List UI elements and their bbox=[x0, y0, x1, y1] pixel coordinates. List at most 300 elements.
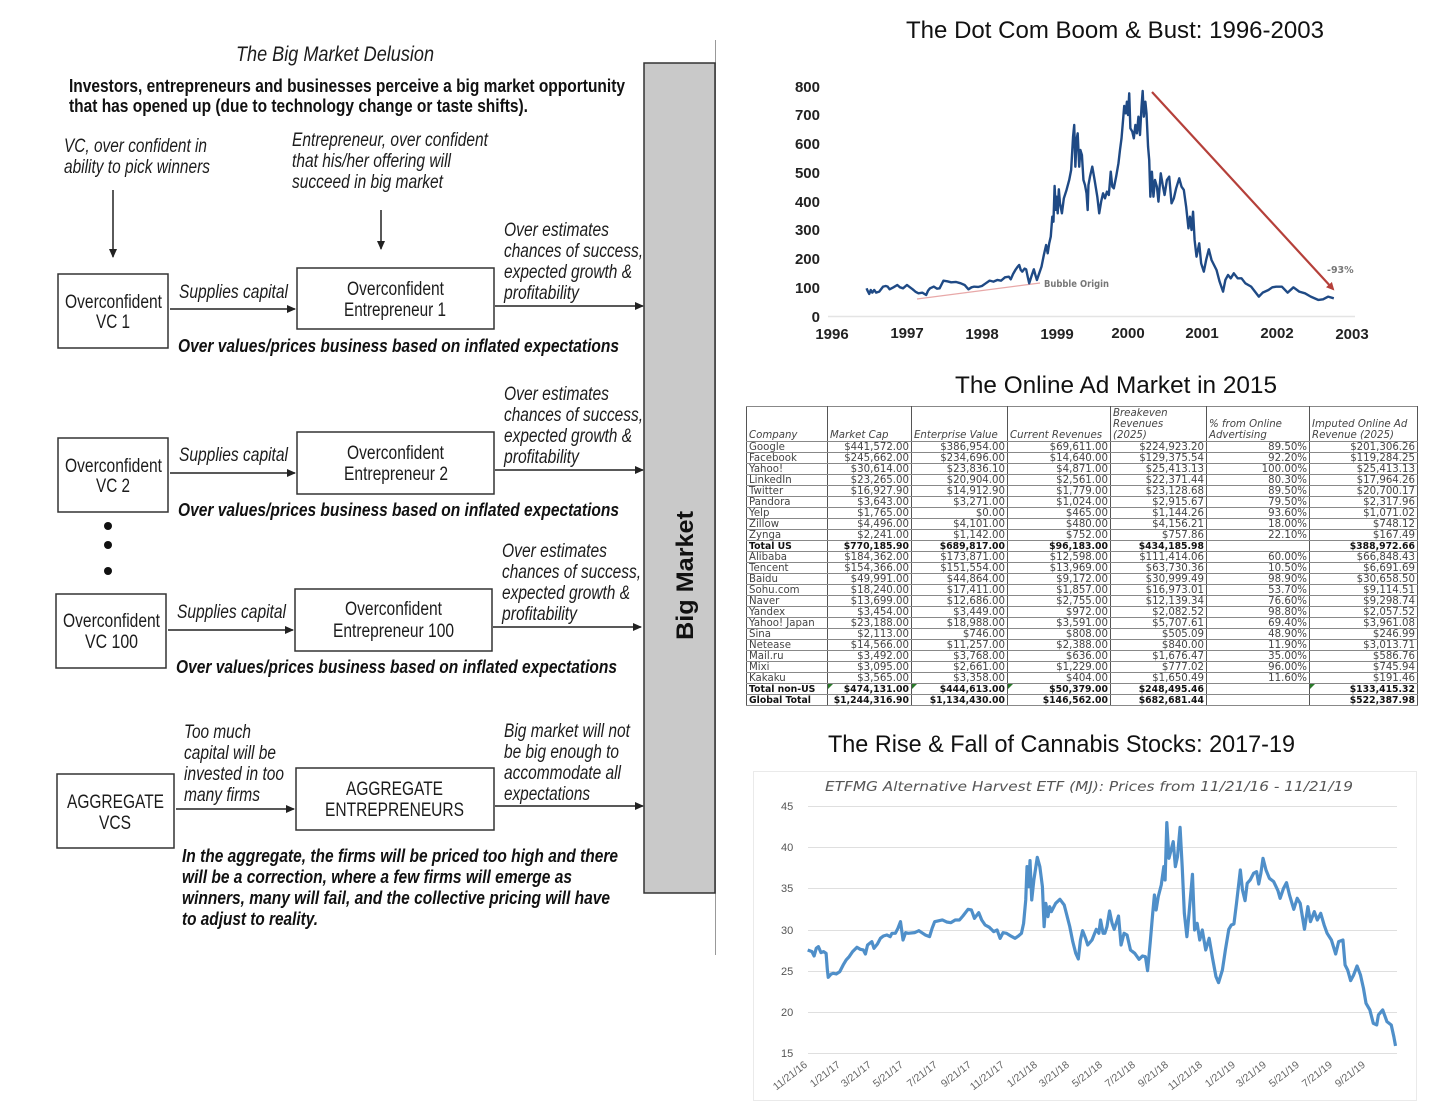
table: online ad market: Netease bbox=[749, 640, 791, 651]
diagram title: The Big Market Delusion bbox=[236, 43, 434, 66]
table: online ad market: Current Revenues bbox=[1010, 430, 1102, 441]
label: supplies capital: Supplies capital bbox=[179, 282, 289, 303]
arrow: VC 1 to entrepreneur 1 bbox=[170, 308, 295, 310]
table: online ad market: $972.00 bbox=[1066, 607, 1108, 618]
table: online ad market: $522,387.98 bbox=[1350, 695, 1415, 706]
intro statement: that has opened up (due to technology change or taste shifts). bbox=[69, 96, 528, 116]
table: online ad market: 93.60% bbox=[1268, 508, 1307, 519]
table: online ad market: $636.00 bbox=[1066, 651, 1108, 662]
table: online ad market: 98.80% bbox=[1268, 607, 1307, 618]
box: overconfident entrepreneur 2 bbox=[297, 432, 494, 494]
box: overconfident VC 2: VC 2 bbox=[96, 476, 130, 497]
table: online ad market: $191.46 bbox=[1373, 673, 1415, 684]
y axis labels: 700 bbox=[795, 107, 820, 124]
note: over estimates bbox=[501, 541, 641, 625]
note: big market will not: expectations bbox=[504, 784, 590, 805]
table: online ad market: $480.00 bbox=[1066, 519, 1108, 530]
y axis labels: 200 bbox=[795, 251, 820, 268]
table: online ad market: $3,271.00 bbox=[953, 497, 1005, 508]
y axis labels bbox=[781, 801, 793, 1060]
table: online ad market: $5,707.61 bbox=[1152, 618, 1204, 629]
table: online ad market: $23,188.00 bbox=[851, 618, 909, 629]
note: over estimates: chances of success, bbox=[504, 241, 643, 262]
arrow: entrepreneur note down bbox=[380, 210, 382, 249]
arrow: VC note down bbox=[112, 190, 114, 257]
table: online ad market: Enterprise Value bbox=[914, 430, 998, 441]
table: online ad market: $9,114.51 bbox=[1363, 585, 1415, 596]
table: online ad market: 11.60% bbox=[1268, 673, 1307, 684]
note: too much capital: many firms bbox=[184, 785, 260, 806]
row: VC 100 bbox=[56, 541, 641, 677]
table: online ad market: $12,598.00 bbox=[1050, 552, 1108, 563]
table: online ad market: $3,492.00 bbox=[857, 651, 909, 662]
table: online ad market: $808.00 bbox=[1066, 629, 1108, 640]
table: online ad market: $18,240.00 bbox=[851, 585, 909, 596]
conclusion text: to adjust to reality. bbox=[182, 909, 318, 929]
table: online ad market: 48.90% bbox=[1268, 629, 1307, 640]
x axis labels: 1996 bbox=[815, 326, 849, 343]
table: online ad market: $20,700.17 bbox=[1357, 486, 1415, 497]
table: online ad market: Zynga bbox=[749, 530, 781, 541]
y axis labels: 500 bbox=[795, 165, 820, 182]
note: over estimates: Over estimates bbox=[504, 384, 609, 405]
note: overconfident VC: ability to pick winners bbox=[64, 157, 210, 178]
table: online ad market: 53.70% bbox=[1268, 585, 1307, 596]
table: online ad market: $30,999.49 bbox=[1146, 574, 1204, 585]
table: online ad market: $2,915.67 bbox=[1152, 497, 1204, 508]
note: over values: Over values/prices business based on inflated expectations bbox=[178, 500, 619, 520]
table: online ad market: $14,912.90 bbox=[947, 486, 1005, 497]
x axis labels: 5/21/19 bbox=[1267, 1059, 1302, 1090]
table: online ad market: $746.00 bbox=[963, 629, 1005, 640]
table: online ad market: $2,561.00 bbox=[1056, 475, 1108, 486]
table: online ad market: $13,699.00 bbox=[851, 596, 909, 607]
table: online ad market: $167.49 bbox=[1373, 530, 1415, 541]
y axis labels: 40 bbox=[781, 842, 793, 854]
panel: big market delusion diagram bbox=[56, 40, 716, 955]
table: online ad market: Naver bbox=[749, 596, 779, 607]
table: online ad market: $23,836.10 bbox=[947, 464, 1005, 475]
note: overconfident entrepreneur: that his/her offering will bbox=[292, 151, 452, 172]
table: online ad market: $748.12 bbox=[1373, 519, 1415, 530]
x axis labels: 11/21/16 bbox=[771, 1059, 810, 1093]
x axis labels: 9/21/19 bbox=[1333, 1059, 1368, 1090]
table: online ad market: $682,681.44 bbox=[1139, 695, 1204, 706]
table: online ad market: $689,817.00 bbox=[940, 541, 1005, 552]
box: aggregate entrepreneurs: AGGREGATE bbox=[346, 779, 443, 800]
table: online ad market: $3,454.00 bbox=[857, 607, 909, 618]
table: online ad market: $96,183.00 bbox=[1049, 541, 1108, 552]
x axis labels: 2001 bbox=[1185, 325, 1219, 342]
note: over estimates: chances of success, bbox=[504, 405, 643, 426]
table: online ad market: $25,413.13 bbox=[1357, 464, 1415, 475]
index price line bbox=[867, 91, 1334, 300]
row: aggregate bbox=[57, 721, 643, 848]
table: online ad market: $69,611.00 bbox=[1050, 442, 1108, 453]
x axis labels: 5/21/18 bbox=[1070, 1059, 1105, 1090]
note: over estimates: profitability bbox=[501, 604, 578, 625]
table: online ad market: Twitter bbox=[749, 486, 783, 497]
table: online ad market: $441,572.00 bbox=[844, 442, 909, 453]
note: overconfident VC bbox=[64, 136, 210, 178]
table: online ad market: Global Total bbox=[749, 695, 811, 706]
arrow: aggregate VCs to aggregate entrepreneurs bbox=[176, 808, 294, 810]
note: big market will not: accommodate all bbox=[504, 763, 622, 784]
x axis labels bbox=[815, 325, 1369, 343]
table: online ad market: $2,113.00 bbox=[857, 629, 909, 640]
table: online ad market: 79.50% bbox=[1268, 497, 1307, 508]
x axis labels: 11/21/18 bbox=[1166, 1059, 1205, 1093]
note: over estimates: profitability bbox=[503, 447, 580, 468]
y axis labels: 15 bbox=[781, 1048, 793, 1060]
box: overconfident entrepreneur 2: Overconfident bbox=[347, 443, 445, 464]
label: minus 93 percent: -93% bbox=[1327, 265, 1354, 276]
table: online ad market: $777.02 bbox=[1162, 662, 1204, 673]
arrow: entrepreneur 100 to big market bbox=[493, 626, 641, 628]
table: online ad market: Alibaba bbox=[749, 552, 787, 563]
y axis labels: 30 bbox=[781, 925, 793, 937]
table: online ad market: 11.90% bbox=[1268, 640, 1307, 651]
table: online ad market: $1,024.00 bbox=[1056, 497, 1108, 508]
label: supplies capital: Supplies capital bbox=[177, 602, 287, 623]
table: online ad market: Mixi bbox=[749, 662, 769, 673]
table: online ad market bbox=[746, 406, 1418, 706]
table: online ad market: $63,730.36 bbox=[1146, 563, 1204, 574]
y axis labels: 45 bbox=[781, 801, 793, 813]
table: online ad market: $14,566.00 bbox=[851, 640, 909, 651]
note: overconfident entrepreneur: succeed in big market bbox=[292, 172, 444, 193]
y axis labels: 100 bbox=[795, 280, 820, 297]
note: over estimates: expected growth & bbox=[504, 426, 632, 447]
label: supplies capital: Supplies capital bbox=[179, 445, 289, 466]
note: overconfident VC: VC, over confident in bbox=[64, 136, 207, 157]
table: online ad market: $245,662.00 bbox=[844, 453, 909, 464]
table: online ad market: Yahoo! bbox=[749, 464, 783, 475]
table: online ad market: Breakeven bbox=[1113, 408, 1168, 419]
row: VC 2 bbox=[58, 384, 643, 520]
note: overconfident entrepreneur bbox=[292, 130, 489, 193]
y axis labels: 600 bbox=[795, 136, 820, 153]
table: online ad market: Revenue (2025) bbox=[1312, 430, 1394, 441]
conclusion text: will be a correction, where a few firms will emerge as bbox=[182, 867, 572, 887]
table: online ad market: LinkedIn bbox=[749, 475, 792, 486]
table: online ad market: $22,371.44 bbox=[1146, 475, 1204, 486]
table: online ad market: 98.90% bbox=[1268, 574, 1307, 585]
table: online ad market: $404.00 bbox=[1066, 673, 1108, 684]
note: over estimates bbox=[503, 384, 643, 468]
x axis labels: 1/21/19 bbox=[1203, 1059, 1238, 1090]
table: online ad market: $6,691.69 bbox=[1363, 563, 1415, 574]
table: online ad market: $129,375.54 bbox=[1139, 453, 1204, 464]
x axis labels: 1/21/18 bbox=[1005, 1059, 1040, 1090]
ellipsis dots bbox=[104, 522, 112, 575]
x axis labels: 1999 bbox=[1040, 326, 1074, 343]
y axis labels: 0 bbox=[812, 309, 820, 326]
table: online ad market: $119,284.25 bbox=[1350, 453, 1415, 464]
table: online ad market: 92.20% bbox=[1268, 453, 1307, 464]
table: online ad market: $3,095.00 bbox=[857, 662, 909, 673]
table: online ad market: $246.99 bbox=[1373, 629, 1415, 640]
table: online ad market: $3,013.71 bbox=[1363, 640, 1415, 651]
table: online ad market: % from Online bbox=[1209, 419, 1282, 430]
box: aggregate VCs: VCS bbox=[99, 813, 131, 834]
red decline arrow bbox=[1152, 92, 1333, 289]
line chart: dot com boom and bust bbox=[795, 79, 1369, 343]
x axis labels: 2003 bbox=[1335, 326, 1369, 343]
table: online ad market: $17,411.00 bbox=[947, 585, 1005, 596]
table: online ad market: $474,131.00 bbox=[844, 684, 909, 695]
note: over estimates: Over estimates bbox=[504, 220, 609, 241]
x axis labels: 3/21/17 bbox=[839, 1059, 874, 1090]
note: over estimates: chances of success, bbox=[502, 562, 641, 583]
table: online ad market: 22.10% bbox=[1268, 530, 1307, 541]
table: online ad market: $9,298.74 bbox=[1363, 596, 1415, 607]
table: online ad market: Kakaku bbox=[749, 673, 786, 684]
heading: online ad market: The Online Ad Market in 2015 bbox=[955, 372, 1277, 399]
box: overconfident entrepreneur 1: Overconfident bbox=[347, 279, 445, 300]
box: overconfident VC 1: Overconfident bbox=[65, 292, 163, 313]
table: online ad market: $3,565.00 bbox=[857, 673, 909, 684]
box: overconfident VC 2: Overconfident bbox=[65, 456, 163, 477]
table: online ad market: $388,972.66 bbox=[1350, 541, 1415, 552]
note: over estimates: profitability bbox=[503, 283, 580, 304]
y axis labels: 25 bbox=[781, 966, 793, 978]
x axis labels: 1/21/17 bbox=[808, 1059, 843, 1090]
table: online ad market: $4,156.21 bbox=[1152, 519, 1204, 530]
table: online ad market: Total non-US bbox=[749, 684, 815, 695]
table: online ad market: $1,229.00 bbox=[1056, 662, 1108, 673]
table: online ad market: $4,871.00 bbox=[1056, 464, 1108, 475]
note: over values: Over values/prices business based on inflated expectations bbox=[178, 336, 619, 356]
arrow: aggregate entrepreneurs to big market bbox=[495, 805, 643, 807]
conclusion text: In the aggregate, the firms will be priced too high and there bbox=[182, 846, 618, 866]
y axis labels: 300 bbox=[795, 222, 820, 239]
table: online ad market: $12,686.00 bbox=[947, 596, 1005, 607]
table: online ad market: $23,128.68 bbox=[1146, 486, 1204, 497]
table: online ad market: Pandora bbox=[749, 497, 791, 508]
table: online ad market: $1,650.49 bbox=[1152, 673, 1204, 684]
note: too much capital: invested in too bbox=[184, 764, 284, 785]
table: online ad market: Tencent bbox=[749, 563, 789, 574]
y axis labels: 35 bbox=[781, 883, 793, 895]
big market bar bbox=[644, 63, 715, 893]
table: online ad market: $3,961.08 bbox=[1363, 618, 1415, 629]
table: online ad market: Yelp bbox=[749, 508, 769, 519]
table: online ad market: 89.50% bbox=[1268, 442, 1307, 453]
table: online ad market: $505.09 bbox=[1162, 629, 1204, 640]
table: online ad market: $2,241.00 bbox=[857, 530, 909, 541]
box: overconfident VC 1 bbox=[58, 274, 168, 348]
table: online ad market: 89.50% bbox=[1268, 486, 1307, 497]
note: over values: Over values/prices business based on inflated expectations bbox=[176, 657, 617, 677]
table: online ad market: $752.00 bbox=[1066, 530, 1108, 541]
table: online ad market: $1,244,316.90 bbox=[834, 695, 909, 706]
y axis labels: 800 bbox=[795, 79, 820, 96]
intro statement bbox=[69, 76, 625, 116]
table: online ad market: $1,144.26 bbox=[1152, 508, 1204, 519]
table: online ad market: $770,185.90 bbox=[844, 541, 909, 552]
arrow: entrepreneur 1 to big market bbox=[495, 305, 643, 307]
x axis labels: 7/21/17 bbox=[905, 1059, 940, 1090]
note: too much capital: capital will be bbox=[184, 743, 276, 764]
table: online ad market: $586.76 bbox=[1373, 651, 1415, 662]
box: aggregate entrepreneurs bbox=[296, 768, 494, 830]
heading: cannabis stocks: The Rise & Fall of Cannabis Stocks: 2017-19 bbox=[828, 731, 1295, 758]
table: online ad market: $13,969.00 bbox=[1050, 563, 1108, 574]
heading: dot com: The Dot Com Boom & Bust: 1996-2003 bbox=[906, 17, 1324, 44]
box: aggregate entrepreneurs: ENTREPRENEURS bbox=[325, 800, 464, 821]
table: online ad market: Imputed Online Ad bbox=[1312, 419, 1407, 430]
table: online ad market: $840.00 bbox=[1162, 640, 1204, 651]
conclusion text: winners, many will fail, and the collective pricing will have bbox=[182, 888, 610, 908]
table: online ad market: $18,988.00 bbox=[947, 618, 1005, 629]
table: online ad market: $3,358.00 bbox=[953, 673, 1005, 684]
price line bbox=[808, 823, 1396, 1046]
label: bubble origin: Bubble Origin bbox=[1044, 279, 1109, 290]
conclusion text bbox=[182, 846, 618, 929]
table: online ad market: $111,414.06 bbox=[1139, 552, 1204, 563]
table: online ad market: $1,676.47 bbox=[1152, 651, 1204, 662]
big market bar: Big Market bbox=[672, 511, 699, 640]
table: online ad market: Sohu.com bbox=[749, 585, 800, 596]
x axis labels: 7/21/18 bbox=[1103, 1059, 1138, 1090]
table: online ad market: $133,415.32 bbox=[1350, 684, 1415, 695]
table: online ad market: Revenues bbox=[1113, 419, 1163, 430]
table: online ad market: Yandex bbox=[749, 607, 785, 618]
box: overconfident entrepreneur 100 bbox=[295, 589, 492, 651]
box: overconfident VC 1: VC 1 bbox=[96, 312, 130, 333]
table: online ad market: $30,614.00 bbox=[851, 464, 909, 475]
table: online ad market: 18.00% bbox=[1268, 519, 1307, 530]
x axis labels: 1998 bbox=[965, 326, 999, 343]
table: online ad market: $23,265.00 bbox=[851, 475, 909, 486]
intro statement: Investors, entrepreneurs and businesses perceive a big market opportunity bbox=[69, 76, 625, 96]
arrow: VC 2 to entrepreneur 2 bbox=[170, 472, 295, 474]
note: big market will not: Big market will not bbox=[504, 721, 631, 742]
table: online ad market: $1,779.00 bbox=[1056, 486, 1108, 497]
table: online ad market: $17,964.26 bbox=[1357, 475, 1415, 486]
arrow: entrepreneur 2 to big market bbox=[495, 469, 643, 471]
table: online ad market: $3,768.00 bbox=[953, 651, 1005, 662]
table: online ad market: $173,871.00 bbox=[940, 552, 1005, 563]
box: overconfident entrepreneur 100: Overconfident bbox=[345, 599, 443, 620]
box: overconfident entrepreneur 1 bbox=[297, 268, 494, 329]
table: online ad market: $4,496.00 bbox=[857, 519, 909, 530]
table: online ad market: Sina bbox=[749, 629, 771, 640]
table: online ad market: Google bbox=[749, 442, 785, 453]
table: online ad market: $30,658.50 bbox=[1357, 574, 1415, 585]
table: online ad market: $16,927.90 bbox=[851, 486, 909, 497]
box: overconfident VC 100: VC 100 bbox=[85, 632, 138, 653]
table: online ad market: 60.00% bbox=[1268, 552, 1307, 563]
table: online ad market: $12,139.34 bbox=[1146, 596, 1204, 607]
table: online ad market: $11,257.00 bbox=[947, 640, 1005, 651]
x axis labels: 2002 bbox=[1260, 325, 1294, 342]
x axis labels: 2000 bbox=[1111, 325, 1145, 342]
box: overconfident VC 100: Overconfident bbox=[63, 611, 161, 632]
table: online ad market: $14,640.00 bbox=[1050, 453, 1108, 464]
table: online ad market: $386,954.00 bbox=[940, 442, 1005, 453]
line chart: cannabis ETF prices bbox=[754, 772, 1416, 1100]
table: online ad market: $146,562.00 bbox=[1043, 695, 1108, 706]
box: overconfident VC 2 bbox=[58, 438, 168, 512]
box: aggregate VCs: AGGREGATE bbox=[67, 792, 164, 813]
table: online ad market: $1,765.00 bbox=[857, 508, 909, 519]
table: online ad market: Advertising bbox=[1209, 430, 1267, 441]
box: overconfident VC 100 bbox=[56, 594, 166, 668]
note: big market will not: be big enough to bbox=[504, 742, 619, 763]
table: online ad market: 96.00% bbox=[1268, 662, 1307, 673]
table: online ad market: $2,388.00 bbox=[1056, 640, 1108, 651]
x axis labels bbox=[771, 1059, 1368, 1093]
table: online ad market: $2,082.52 bbox=[1152, 607, 1204, 618]
table: online ad market: Total US bbox=[749, 541, 792, 552]
table: online ad market: $444,613.00 bbox=[940, 684, 1005, 695]
table: online ad market: $25,413.13 bbox=[1146, 464, 1204, 475]
x axis labels: 3/21/19 bbox=[1234, 1059, 1269, 1090]
table: online ad market: $184,362.00 bbox=[844, 552, 909, 563]
table: online ad market: Yahoo! Japan bbox=[749, 618, 815, 629]
table: online ad market: $2,317.96 bbox=[1363, 497, 1415, 508]
box: overconfident entrepreneur 1: Entrepreneur 1 bbox=[344, 300, 446, 321]
table: online ad market: $49,991.00 bbox=[851, 574, 909, 585]
table: online ad market: $151,554.00 bbox=[940, 563, 1005, 574]
table: online ad market: $1,857.00 bbox=[1056, 585, 1108, 596]
x axis labels: 1997 bbox=[890, 325, 924, 342]
table: online ad market: 10.50% bbox=[1268, 563, 1307, 574]
note: over estimates: expected growth & bbox=[502, 583, 630, 604]
table: online ad market: 100.00% bbox=[1262, 464, 1307, 475]
table: online ad market: $434,185.98 bbox=[1139, 541, 1204, 552]
table: online ad market: $3,643.00 bbox=[857, 497, 909, 508]
x axis labels: 5/21/17 bbox=[871, 1059, 906, 1090]
table: online ad market: $745.94 bbox=[1373, 662, 1415, 673]
table: online ad market: $248,495.46 bbox=[1139, 684, 1204, 695]
y axis labels: 20 bbox=[781, 1007, 793, 1019]
arrow: VC 100 to entrepreneur 100 bbox=[168, 629, 293, 631]
table: online ad market: $201,306.26 bbox=[1350, 442, 1415, 453]
table: online ad market: Market Cap bbox=[830, 430, 888, 441]
table: online ad market: $154,366.00 bbox=[844, 563, 909, 574]
note: overconfident entrepreneur: Entrepreneur, over confident bbox=[292, 130, 489, 151]
table: online ad market: $1,071.02 bbox=[1363, 508, 1415, 519]
y axis labels: 400 bbox=[795, 194, 820, 211]
note: over estimates: expected growth & bbox=[504, 262, 632, 283]
table: online ad market: $757.86 bbox=[1162, 530, 1204, 541]
table: online ad market: $16,973.01 bbox=[1146, 585, 1204, 596]
table: online ad market: $9,172.00 bbox=[1056, 574, 1108, 585]
note: big market will not bbox=[504, 721, 631, 805]
table: online ad market: Facebook bbox=[749, 453, 797, 464]
table: online ad market: 76.60% bbox=[1268, 596, 1307, 607]
table: online ad market: $20,904.00 bbox=[947, 475, 1005, 486]
x axis labels: 9/21/17 bbox=[939, 1059, 974, 1090]
table: online ad market: $2,057.52 bbox=[1363, 607, 1415, 618]
table: online ad market: 69.40% bbox=[1268, 618, 1307, 629]
table: online ad market: $224,923.20 bbox=[1139, 442, 1204, 453]
table: online ad market: (2025) bbox=[1113, 430, 1147, 441]
table: online ad market: $66,848.43 bbox=[1357, 552, 1415, 563]
table: online ad market: $1,134,430.00 bbox=[930, 695, 1005, 706]
box: overconfident entrepreneur 2: Entrepreneur 2 bbox=[344, 464, 448, 485]
table: online ad market: $3,449.00 bbox=[953, 607, 1005, 618]
table: online ad market: Mail.ru bbox=[749, 651, 784, 662]
box: overconfident entrepreneur 100: Entrepreneur 100 bbox=[333, 621, 454, 642]
x axis labels: 3/21/18 bbox=[1037, 1059, 1072, 1090]
table: online ad market: $0.00 bbox=[976, 508, 1005, 519]
x axis labels: 9/21/18 bbox=[1136, 1059, 1171, 1090]
row: VC 1 bbox=[58, 220, 643, 356]
